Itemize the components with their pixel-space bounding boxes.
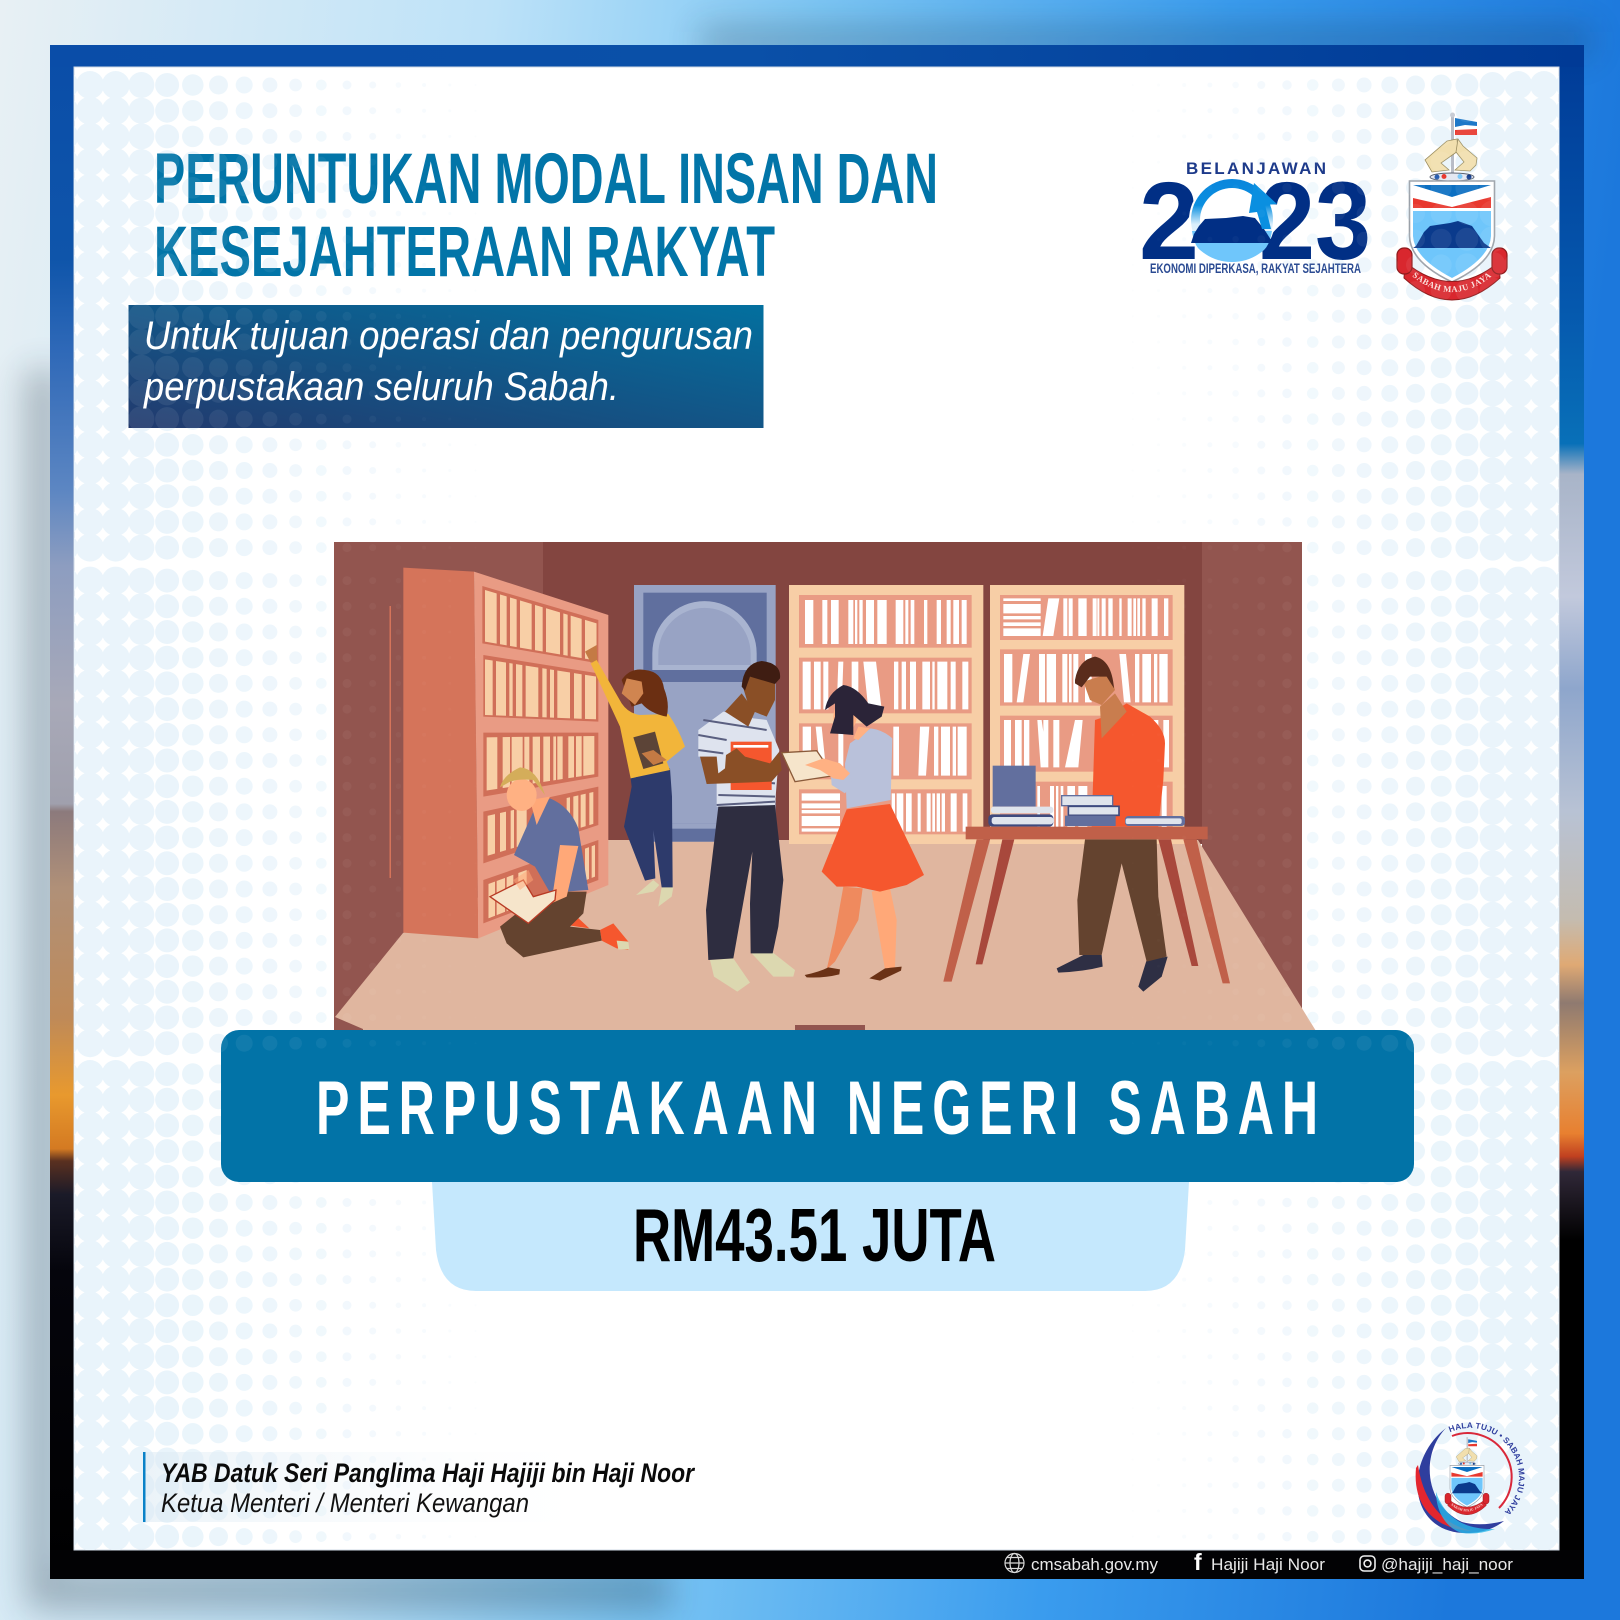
subtitle box: Untuk tujuan operasi dan pengurusan <box>144 314 753 358</box>
dot overlay <box>128 119 1508 1052</box>
man holding red book <box>698 661 795 992</box>
logo: Hala Tuju Sabah Maju Jaya <box>1416 1422 1525 1534</box>
subtitle box: perpustakaan seluruh Sabah. <box>143 365 619 409</box>
caption banner <box>221 1030 1414 1182</box>
logo: Belanjawan 2023: 23 <box>1259 160 1371 283</box>
amount box: RM43.51 JUTA <box>633 1193 996 1277</box>
logo: Belanjawan 2023 <box>1139 159 1371 283</box>
title <box>154 140 938 292</box>
illustration: library scene <box>334 530 1316 1031</box>
woman reaching for a book <box>585 645 685 907</box>
left-scene figures (zoom coordinates) <box>403 530 795 992</box>
footer: social links: cmsabah.gov.my <box>1031 1555 1158 1574</box>
right-scene figures (zoom coordinates) <box>782 585 1230 992</box>
footer: social links: @hajiji_haji_noor <box>1381 1555 1513 1574</box>
bookcases with white books <box>789 585 1184 844</box>
logo: Sabah crest <box>1396 112 1508 300</box>
title: PERUNTUKAN MODAL INSAN DAN <box>154 140 938 219</box>
signature block: Ketua Menteri / Menteri Kewangan <box>161 1488 529 1518</box>
amount box <box>432 1182 1189 1291</box>
subtitle box <box>128 305 764 428</box>
table <box>943 827 1230 983</box>
icon: globe <box>1005 1554 1024 1572</box>
logo: Belanjawan 2023: BELANJAWAN <box>1186 159 1326 178</box>
seated man reading <box>490 767 629 957</box>
signature block: YAB Datuk Seri Panglima Haji Hajiji bin Haji Noor <box>161 1458 695 1488</box>
signature block <box>143 1452 695 1522</box>
logo: Sabah crest: SABAH MAJU JAYA <box>1412 272 1492 292</box>
man at the table <box>1057 657 1168 992</box>
tall bookcase <box>403 568 608 938</box>
room walls and floor <box>334 542 1316 1031</box>
stacked books on table <box>988 766 1185 827</box>
door <box>634 585 776 842</box>
icon: instagram <box>1360 1556 1375 1571</box>
logo: Hala Tuju Sabah Maju Jaya: HALA TUJU • SABAH MAJU JAYA <box>1448 1422 1525 1514</box>
logo: Belanjawan 2023: 2 <box>1139 160 1199 283</box>
footer: social links <box>1005 1549 1513 1575</box>
title: KESEJAHTERAAN RAKYAT <box>154 213 775 292</box>
footer: social links: Hajiji Haji Noor <box>1211 1555 1325 1574</box>
icon: facebook: f <box>1194 1549 1202 1575</box>
woman in red skirt <box>782 685 924 981</box>
logo: Belanjawan 2023: EKONOMI DIPERKASA, RAKYAT SEJAHTERA <box>1150 261 1361 276</box>
